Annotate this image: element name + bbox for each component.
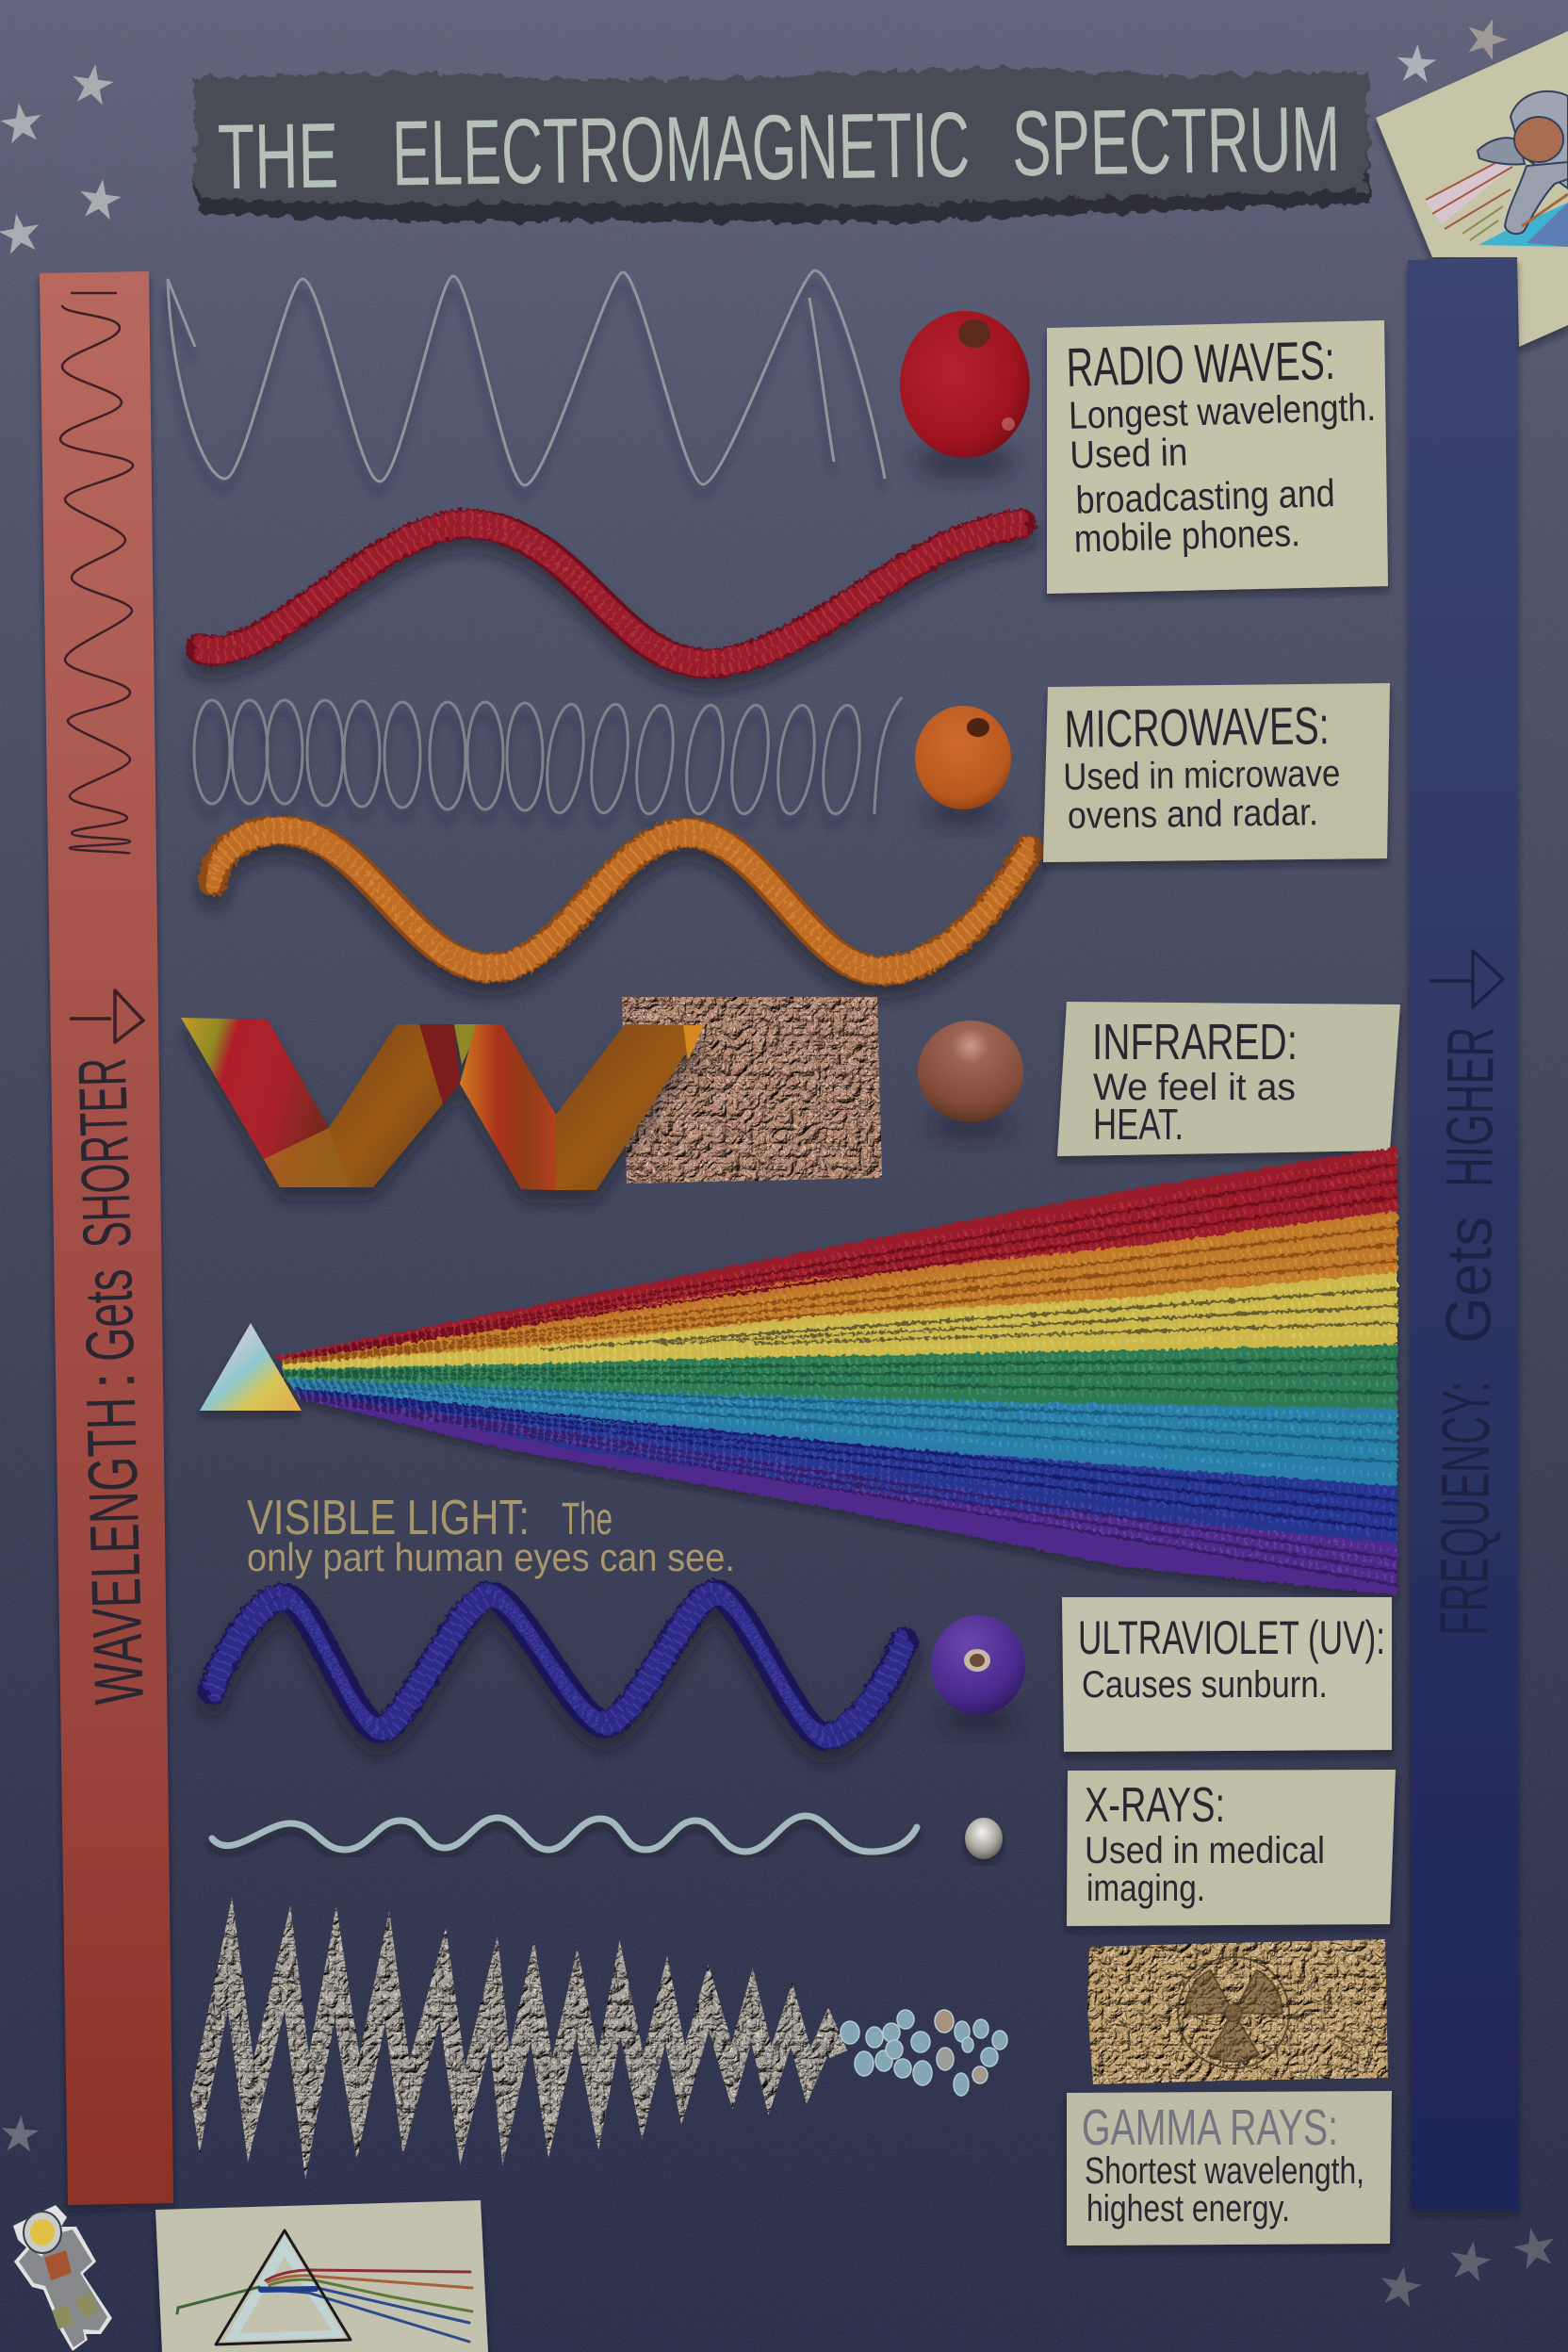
x-rays: thin silver wave [212,1816,917,1852]
sketch: wave getting shorter [60,293,133,854]
strip label: wavelength gets shorter: WAVELENGTH [72,1396,158,1706]
title text: SPECTRUM [1011,87,1341,195]
card text: highest energy. [1086,2188,1290,2230]
card text [1066,329,1380,561]
title text: THE [217,103,339,208]
arrow: wavelength [70,990,143,1042]
visible light label [247,1491,735,1579]
band: red [274,1147,1397,1362]
bottom left star [0,2115,40,2152]
card text: Used in microwave [1063,753,1341,798]
card text: INFRARED: [1092,1014,1298,1070]
icon: astronaut sticker [13,2205,112,2351]
card text: Longest wavelength. [1069,385,1377,437]
gamma rays: information card [1067,2091,1392,2246]
left wavelength strip [40,271,173,2205]
prism sketch card [155,2200,488,2352]
icon: radiation trefoil [1178,1957,1289,2068]
card text: mobile phones. [1073,511,1300,561]
title banner [192,68,1370,222]
microwaves: orange bead [915,706,1011,825]
infrared: information card [1057,1002,1400,1156]
yarn strands [283,1164,1397,1585]
sketch: pale prism fill [224,2235,345,2341]
decorative silver stars top left [0,61,123,255]
strip label: frequency gets higher: Gets [1432,1216,1506,1344]
strip label: frequency gets higher: FREQUENCY: [1427,1380,1505,1636]
visible light label: The [562,1494,612,1544]
right frequency strip [1408,257,1518,2210]
strip label: frequency gets higher: HIGHER [1432,1026,1508,1187]
band: blue [294,1387,1397,1545]
strip label: wavelength gets shorter: : [74,1370,149,1391]
card text [1082,2099,1364,2230]
arrow: frequency [1429,951,1503,1007]
card text: MICROWAVES: [1064,695,1330,759]
band: orange [283,1211,1397,1366]
band: yellow [283,1272,1397,1371]
card text: RADIO WAVES: [1066,330,1336,399]
band: teal [286,1379,1397,1489]
sketch: incoming beam and spectrum rays [177,2270,472,2342]
sketch: prism outline [216,2230,351,2344]
card text: HEAT. [1093,1100,1184,1149]
visible light: holographic prism [200,1323,302,1411]
radio waves: information card [1047,320,1388,594]
ultraviolet: purple bead [931,1615,1025,1732]
visible light label: only part human eyes can see. [247,1535,735,1579]
gamma rays: gold foil with radiation symbol [1087,1939,1388,2084]
gamma rays: glass beads [841,2010,1007,2096]
infrared: copper bead [918,1021,1023,1139]
icon: astronaut floating [1478,91,1568,247]
bottom right stars [1377,2224,1559,2309]
card text [1078,1611,1385,1706]
card text: Used in [1070,430,1188,477]
card text: ovens and radar. [1068,792,1318,837]
card text [1092,1014,1298,1149]
band: purple [298,1392,1397,1595]
card text [1085,1778,1325,1909]
microwaves: orange yarn [213,824,1029,977]
radio waves: red bead [900,311,1030,479]
decorative silver stars top right [1396,12,1512,83]
card text: ULTRAVIOLET (UV): [1078,1611,1385,1664]
ultraviolet: information card [1062,1597,1392,1752]
card text: We feel it as [1093,1067,1296,1108]
radio waves: wire wave [168,270,885,485]
gamma rays: silver foil zigzag [190,1953,839,2155]
title text: ELECTROMAGNETIC [391,92,971,204]
card text: broadcasting and [1075,471,1335,522]
strip label: wavelength gets shorter: Gets [71,1268,149,1363]
visible light: rainbow yarn fan [274,1147,1397,1595]
x-rays: information card [1067,1770,1396,1926]
x-rays: silver bead [965,1818,1003,1859]
card text: Causes sunburn. [1082,1664,1328,1706]
card text: Used in medical [1085,1830,1325,1871]
microwaves: information card [1043,683,1390,862]
top right astronaut paper [1376,31,1568,347]
card text [1062,695,1341,837]
card text: GAMMA RAYS: [1082,2099,1338,2156]
card text: Shortest wavelength, [1085,2150,1364,2192]
microwaves: wire coil [194,697,902,816]
card text: X-RAYS: [1085,1778,1225,1833]
card text: imaging. [1086,1868,1205,1909]
ultraviolet: blue yarn [209,1588,907,1742]
radio waves: red yarn [200,517,1021,670]
rainbow trail [1425,163,1512,240]
strip label: wavelength gets shorter: SHORTER [65,1057,145,1249]
infrared: iridescent zigzag [181,1018,704,1190]
visible light label: VISIBLE LIGHT: [247,1491,530,1545]
band: green [283,1345,1397,1412]
infrared: copper foil [622,997,882,1184]
